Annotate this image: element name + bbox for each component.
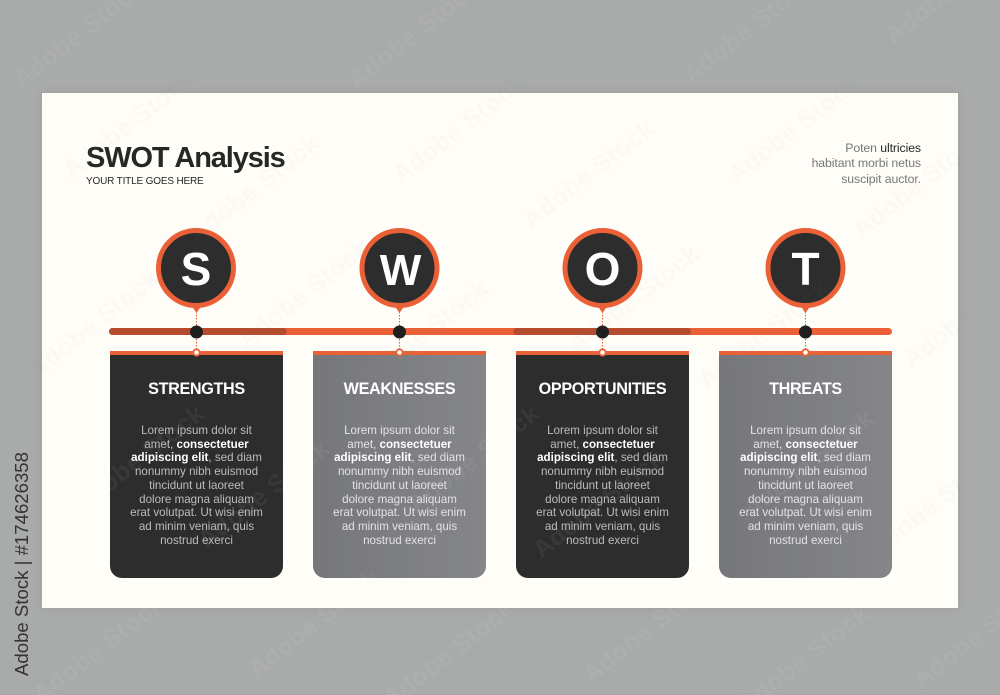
card: strengths: amet, consectetuer [144,438,249,451]
card: threats: tincidunt ut laoreet [758,479,853,492]
card: opportunities: erat volutpat. Ut wisi enim [536,506,669,519]
card: strengths: ad minim veniam, quis [139,520,254,533]
card: opportunities: ad minim veniam, quis [545,520,660,533]
card: strengths [110,351,283,578]
card: weaknesses: amet, consectetuer [347,438,452,451]
card: threats [719,351,892,578]
watermarks: Adobe Stock [723,69,865,189]
card: weaknesses: ad minim veniam, quis [342,520,457,533]
watermarks: Adobe Stock [578,569,720,689]
watermarks: Adobe Stock [848,124,990,244]
top-right note: habitant morbi netus [812,156,921,170]
top-right note [812,141,921,186]
card: weaknesses: nonummy nibh euismod [338,465,461,478]
card: opportunities: tincidunt ut laoreet [555,479,650,492]
watermarks: Adobe Stock [738,404,880,524]
marker: W [362,230,437,351]
card: weaknesses: nostrud exerci [363,534,436,547]
card: threats: amet, consectetuer [753,438,858,451]
card: threats: adipiscing elit, sed diam [740,451,871,464]
marker: T: T [791,243,820,295]
top-right note: suscipit auctor. [841,172,921,186]
top-right note: Poten ultricies [845,141,921,155]
card: strengths: erat volutpat. Ut wisi enim [130,506,263,519]
card: strengths: nostrud exerci [160,534,233,547]
card: opportunities: dolore magna aliquam [545,493,660,506]
card: weaknesses [313,351,486,578]
watermarks: Adobe Stock [563,239,705,359]
card: strengths: STRENGTHS [148,380,245,398]
card: threats: dolore magna aliquam [748,493,863,506]
card: opportunities: nonummy nibh euismod [541,465,664,478]
card: weaknesses: adipiscing elit, sed diam [334,451,465,464]
card: opportunities: amet, consectetuer [550,438,655,451]
watermarks: Adobe Stock [193,434,335,554]
watermarks: Adobe Stock [58,64,200,184]
card: threats: ad minim veniam, quis [748,520,863,533]
marker: S [158,230,234,351]
card: strengths: nonummy nibh euismod [135,465,258,478]
marker: S: S [181,243,211,295]
card: opportunities: OPPORTUNITIES [539,380,666,398]
card: threats: nonummy nibh euismod [744,465,867,478]
watermarks: Adobe Stock [693,274,835,394]
watermarks: Adobe Stock [518,114,660,234]
title: SWOT Analysis [86,142,285,174]
watermarks: Adobe Stock [353,274,495,394]
card: opportunities: Lorem ipsum dolor sit [547,424,658,437]
card: strengths: dolore magna aliquam [139,493,254,506]
card: strengths: adipiscing elit, sed diam [131,451,262,464]
card: opportunities [516,351,689,578]
card: threats: Lorem ipsum dolor sit [750,424,861,437]
card: opportunities: nostrud exerci [566,534,639,547]
watermarks: Adobe Stock [183,129,325,249]
watermarks: Adobe Stock [23,264,165,384]
marker: W: W [380,246,422,295]
background panel [42,93,958,608]
marker: O: O [585,243,620,295]
marker: O [565,230,640,351]
watermarks: Adobe Stock [388,69,530,189]
card: threats: THREATS [769,380,842,398]
card: weaknesses: dolore magna aliquam [342,493,457,506]
card: weaknesses: erat volutpat. Ut wisi enim [333,506,466,519]
card: opportunities: adipiscing elit, sed diam [537,451,668,464]
stock id side label: Adobe Stock | #174626358 [11,452,32,676]
subtitle: YOUR TITLE GOES HERE [86,176,204,187]
marker: T [768,230,843,351]
card: weaknesses: tincidunt ut laoreet [352,479,447,492]
watermarks: Adobe Stock [243,564,385,684]
card: strengths: Lorem ipsum dolor sit [141,424,252,437]
watermarks: Adobe Stock [68,399,210,519]
timeline bar [109,328,892,335]
watermarks: Adobe Stock [403,399,545,519]
card: threats: erat volutpat. Ut wisi enim [739,506,872,519]
card: threats: nostrud exerci [769,534,842,547]
card: weaknesses: WEAKNESSES [344,380,455,398]
card: weaknesses: Lorem ipsum dolor sit [344,424,455,437]
watermarks: Adobe Stock [528,444,670,564]
card: strengths: tincidunt ut laoreet [149,479,244,492]
watermarks: Adobe Stock [233,234,375,354]
